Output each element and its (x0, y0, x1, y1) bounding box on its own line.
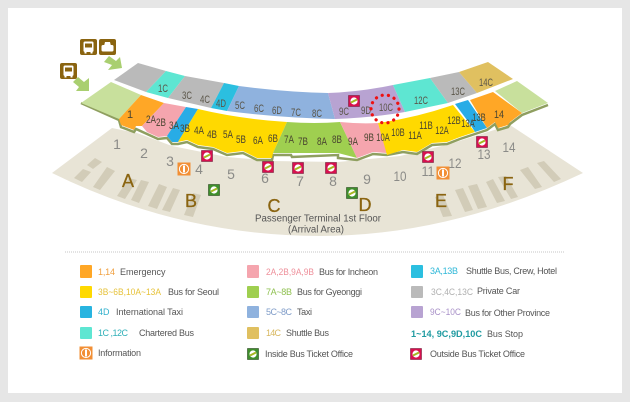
upper row labels: 14C (479, 77, 493, 89)
legend column 3: 1~14, 9C,9D,10C (411, 329, 483, 339)
icon: shuttle (60, 63, 77, 79)
legend column 2: Shuttle Bus (286, 328, 330, 338)
upper row labels: 4D (216, 98, 226, 110)
door numbers: 2 (140, 145, 148, 161)
lower row labels: 7A (284, 134, 294, 146)
section letters: F (502, 174, 514, 194)
upper row labels (158, 77, 493, 120)
lower row labels: 3A (169, 120, 179, 132)
legend column 1: 1C ,12C (98, 328, 128, 338)
section letters: C (268, 196, 280, 216)
legend column 1: Emergency (120, 267, 166, 277)
upper row labels: 9C (339, 106, 349, 118)
upper row labels: 6D (272, 105, 282, 117)
legend column 2: 5C~8C (266, 307, 292, 317)
legend column 2: 2A,2B,9A,9B (266, 267, 314, 277)
legend column 3: Private Car (477, 286, 520, 296)
door numbers: 14 (502, 139, 516, 155)
legend column 3: Bus Stop (487, 329, 523, 339)
upper row labels: 4C (200, 94, 210, 106)
legend (80, 265, 557, 360)
information icons (178, 162, 450, 180)
lower row labels: 2A (146, 114, 156, 126)
upper row labels: 9D (361, 105, 371, 117)
floor title (255, 214, 382, 236)
upper row labels: 12C (414, 95, 428, 107)
outside ticket office icons (202, 96, 488, 174)
legend column 3: 3A,13B (430, 266, 458, 276)
floor title: (Arrival Area) (288, 224, 344, 236)
lower row labels: 11B (419, 120, 433, 132)
arrow: upper entry (104, 56, 122, 70)
lower row labels: 5B (236, 134, 246, 146)
legend column 3 (410, 265, 557, 360)
inside ticket office icons (208, 184, 358, 198)
legend column 2: Taxi (297, 307, 312, 317)
upper row labels: 8C (312, 108, 322, 120)
legend column 2: Inside Bus Ticket Office (265, 349, 353, 359)
icon: car (99, 39, 116, 55)
upper row labels: 3C (182, 90, 192, 102)
section letters (122, 171, 514, 216)
lower row labels: 10B (391, 127, 405, 139)
lower row labels: 6B (268, 133, 278, 145)
lower row labels: 4A (194, 125, 204, 137)
door numbers: 13 (478, 146, 491, 162)
lower row labels: 14 (494, 109, 504, 121)
section letters: B (185, 191, 197, 211)
lower row labels: 7B (298, 136, 308, 148)
curb zones lower row (81, 81, 548, 160)
lower row labels: 4B (207, 129, 217, 141)
door numbers: 4 (195, 161, 203, 177)
legend column 1 (80, 265, 219, 360)
door numbers (113, 136, 516, 189)
lower row labels: 9A (348, 136, 358, 148)
lower row labels: 1 (127, 109, 133, 121)
legend column 2: Bus for Gyeonggi (297, 287, 362, 297)
lower row labels: 10A (376, 132, 390, 144)
lower row labels: 13B (472, 112, 486, 124)
upper row labels: 13C (451, 86, 465, 98)
lower row labels: 2B (156, 117, 166, 129)
legend column 3: Outside Bus Ticket Office (430, 349, 525, 359)
legend column 3: Bus for Other Province (465, 308, 550, 318)
legend column 2: 14C (266, 328, 282, 338)
entry arrows and vehicle icons (60, 39, 122, 91)
section letters: A (122, 171, 134, 191)
lower row labels: 12A (435, 125, 449, 137)
terminal floor (52, 125, 583, 236)
door numbers: 7 (296, 173, 304, 189)
door numbers: 9 (363, 171, 371, 187)
upper row labels: 10C (379, 102, 393, 114)
door numbers: 6 (261, 170, 269, 186)
door numbers: 10 (394, 168, 407, 184)
lower row labels: 13A (461, 118, 475, 130)
legend column 1: International Taxi (116, 307, 183, 317)
red dotted marker (371, 95, 399, 123)
legend column 2: 7A~8B (266, 287, 292, 297)
icon: bus (80, 39, 97, 55)
door numbers: 3 (166, 153, 174, 169)
lower row labels: 12B (447, 115, 461, 127)
legend column 3: 9C~10C (430, 307, 461, 317)
door numbers: 1 (113, 136, 121, 152)
lower row labels: 5A (223, 129, 233, 141)
door numbers: 11 (422, 163, 435, 179)
door numbers: 12 (448, 155, 462, 171)
lower row labels: 8B (332, 134, 342, 146)
upper row labels: 6C (254, 103, 264, 115)
legend column 1: 3B~6B,10A~13A (98, 287, 161, 297)
legend column 2 (247, 265, 378, 360)
upper row labels: 1C (158, 83, 168, 95)
door numbers: 8 (329, 173, 337, 189)
legend column 1: Bus for Seoul (168, 287, 219, 297)
curb zones upper row (114, 62, 513, 119)
legend column 3: Shuttle Bus, Crew, Hotel (466, 266, 557, 276)
lower row labels (127, 109, 504, 148)
upper row labels: 7C (291, 107, 301, 119)
legend column 3: 3C,4C,13C (431, 287, 473, 297)
arrow: lower entry (73, 77, 89, 91)
lower row labels: 11A (408, 130, 422, 142)
floor title: Passenger Terminal 1st Floor (255, 214, 382, 224)
door numbers: 5 (227, 166, 235, 182)
section letters: E (435, 191, 447, 211)
legend column 2: Bus for Incheon (319, 267, 378, 277)
legend column 1: 4D (98, 307, 110, 317)
lower row labels: 9B (364, 132, 374, 144)
legend column 1: 1,14 (98, 267, 115, 277)
upper row labels: 5C (235, 100, 245, 112)
legend column 1: Information (98, 348, 141, 358)
section letters: D (358, 195, 372, 215)
legend column 1: Chartered Bus (139, 328, 194, 338)
lower row labels: 6A (253, 135, 263, 147)
floor gate patches (74, 158, 561, 217)
lower row labels: 8A (317, 136, 327, 148)
lower row labels: 3B (180, 123, 190, 135)
